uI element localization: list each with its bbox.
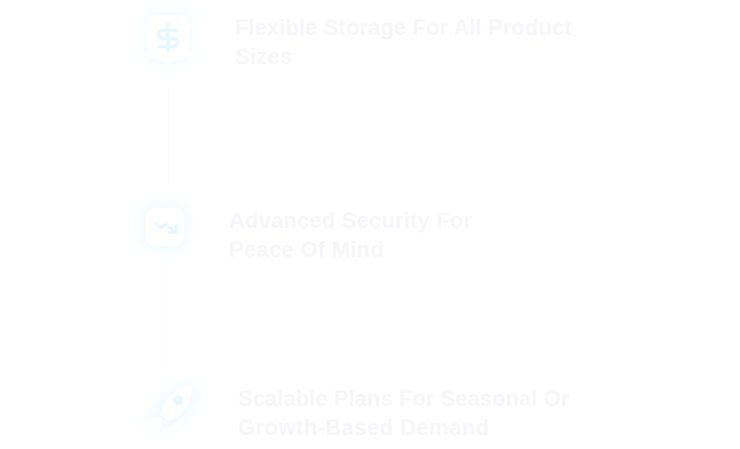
heading: advanced security: Advanced Security For: [229, 208, 472, 233]
heading: flexible storage: Flexible Storage For All Product: [235, 15, 572, 40]
connector line: first to second item: [168, 88, 170, 186]
connector line: second to third item: [166, 266, 168, 368]
heading: flexible storage: Sizes: [235, 44, 293, 69]
heading: scalable plans: Growth-Based Demand: [238, 415, 489, 440]
heading: scalable plans: Scalable Plans For Seasonal Or: [238, 386, 569, 411]
icon: dollar shield: [144, 15, 192, 65]
icon: trending down square: [143, 205, 186, 248]
heading: flexible storage: [235, 15, 572, 69]
heading: advanced security: [229, 208, 472, 262]
heading: advanced security: Peace Of Mind: [229, 237, 384, 262]
icon: rocket: [146, 384, 195, 432]
heading: scalable plans: [238, 386, 569, 440]
